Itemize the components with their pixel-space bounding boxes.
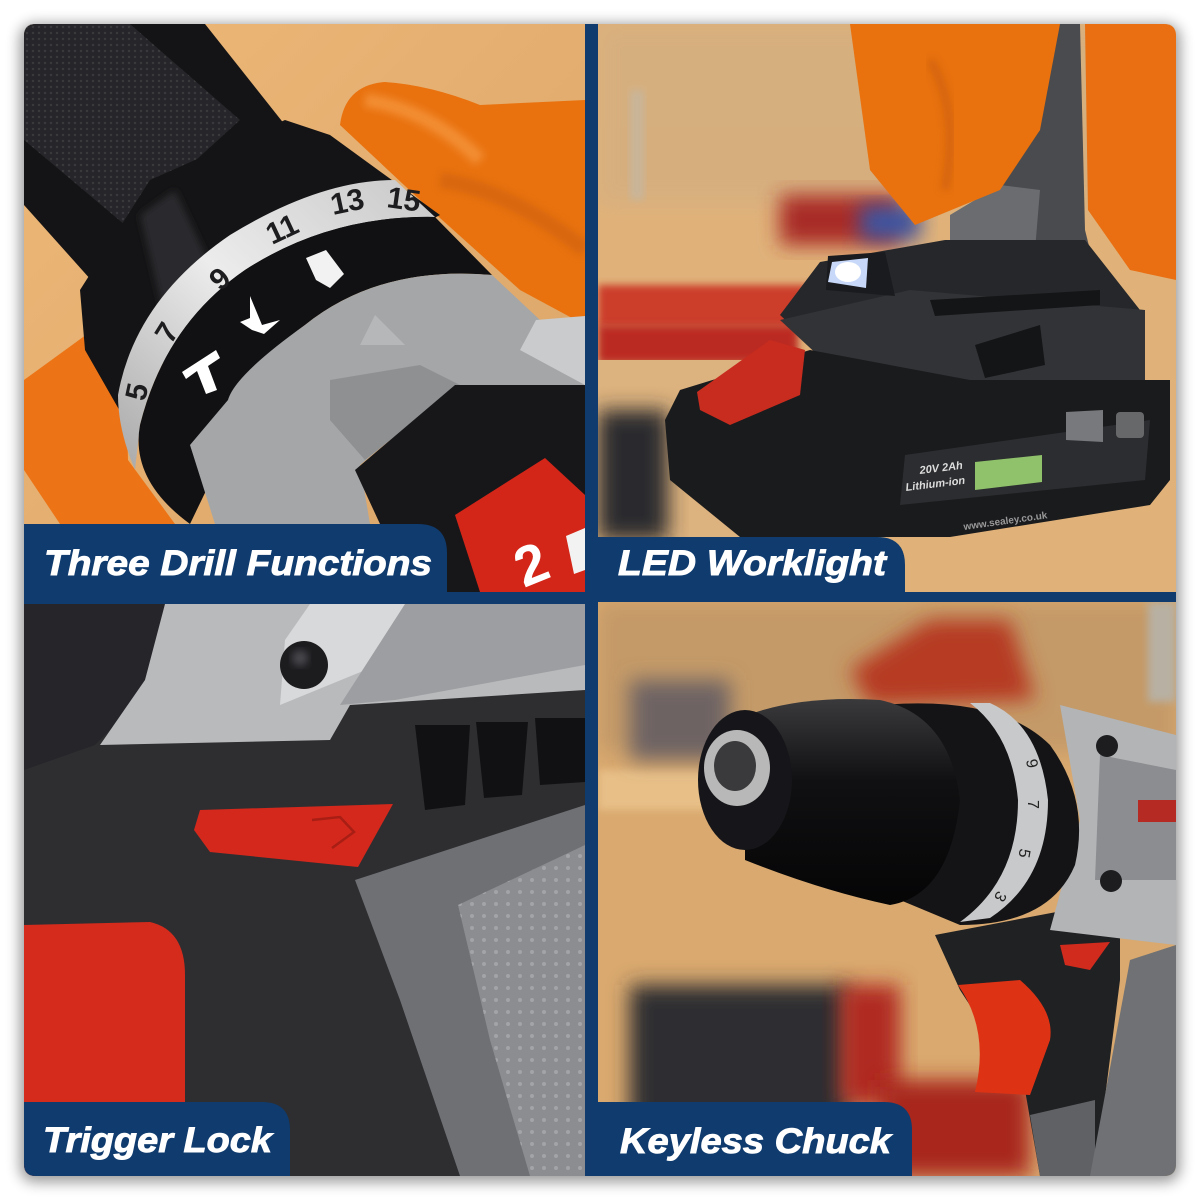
drill chuck body — [24, 24, 285, 290]
scale numbers: 9 — [1022, 758, 1040, 770]
silver scale ring — [960, 703, 1048, 922]
red trigger — [24, 922, 185, 1176]
background: wood — [24, 24, 585, 524]
battery spec text: 20V 2Ah — [918, 460, 964, 477]
panel: keyless chuck — [598, 602, 1176, 1176]
background: blurred workshop — [598, 24, 1176, 592]
drill handle — [935, 900, 1120, 1176]
scale numbers — [120, 181, 423, 403]
icon: housing screws — [1096, 735, 1118, 757]
panel: LED worklight — [598, 24, 1176, 592]
icon: screw head — [280, 641, 328, 689]
tab: three drill functions — [24, 524, 447, 592]
background: blurred workshop — [598, 602, 1176, 1176]
label: LED Worklight — [618, 544, 887, 583]
drill body dark — [24, 604, 585, 1176]
battery clip — [975, 325, 1045, 378]
scale numbers: 15 — [385, 181, 423, 219]
black function ring — [139, 217, 492, 524]
grey drill housing — [1050, 705, 1176, 945]
battery vents — [930, 290, 1100, 316]
grey grip panel — [355, 805, 585, 1176]
battery indicator — [1066, 410, 1103, 442]
battery spec text: Lithium-ion — [905, 475, 966, 494]
scale numbers — [990, 758, 1041, 904]
tab: LED worklight — [585, 537, 905, 592]
label: Three Drill Functions — [44, 544, 432, 583]
top dark corner — [24, 604, 165, 770]
icon: drill bit symbol — [306, 250, 344, 288]
icon: orange glove upper — [340, 82, 585, 325]
icon: orange glove hand — [850, 24, 1060, 225]
tab: trigger lock — [24, 1102, 290, 1176]
red lock — [1060, 942, 1110, 970]
function drill icon on switch — [566, 528, 585, 574]
vent slots — [415, 725, 470, 810]
collar — [80, 120, 440, 420]
icon: LED lamp — [826, 252, 895, 296]
battery spec text — [906, 461, 964, 491]
gear housing — [190, 274, 585, 524]
scale numbers: 11 — [261, 208, 304, 251]
battery base — [665, 350, 1170, 537]
lower black body — [355, 385, 585, 592]
red release button — [697, 340, 805, 425]
label: Keyless Chuck — [620, 1122, 893, 1161]
label: Trigger Lock — [43, 1121, 274, 1160]
icon: screw symbol — [240, 296, 280, 334]
chuck body — [745, 699, 960, 905]
silver housing — [100, 604, 585, 745]
panel: three drill functions — [24, 24, 585, 599]
collar — [880, 703, 1079, 925]
icon: hammer symbol — [182, 350, 220, 394]
icon: red trigger — [958, 980, 1051, 1095]
battery top — [780, 240, 1140, 319]
icon: green rechargeable badge — [975, 455, 1042, 490]
battery label panel — [900, 420, 1150, 505]
scale numbers: 9 — [203, 261, 237, 297]
icon: orange glove lower — [24, 332, 175, 524]
scale numbers: 13 — [328, 183, 367, 222]
silver scale ring — [118, 180, 435, 470]
panel: trigger lock — [24, 604, 585, 1176]
scale numbers: 7 — [149, 317, 186, 349]
grey grip — [1090, 945, 1176, 1176]
scale numbers: 7 — [1024, 800, 1041, 809]
battery website text: www.sealey.co.uk — [962, 510, 1049, 533]
function number on switch: 2 — [505, 529, 557, 599]
scale numbers: 5 — [120, 380, 155, 403]
scale numbers: 3 — [990, 888, 1009, 904]
tab: keyless chuck — [585, 1102, 912, 1176]
drill handle — [1003, 24, 1089, 245]
red switch — [455, 458, 585, 592]
icon: red trigger lock — [194, 804, 393, 867]
sealey badge — [1138, 800, 1176, 822]
chuck nose — [698, 710, 792, 850]
scale numbers: 5 — [1014, 847, 1033, 859]
